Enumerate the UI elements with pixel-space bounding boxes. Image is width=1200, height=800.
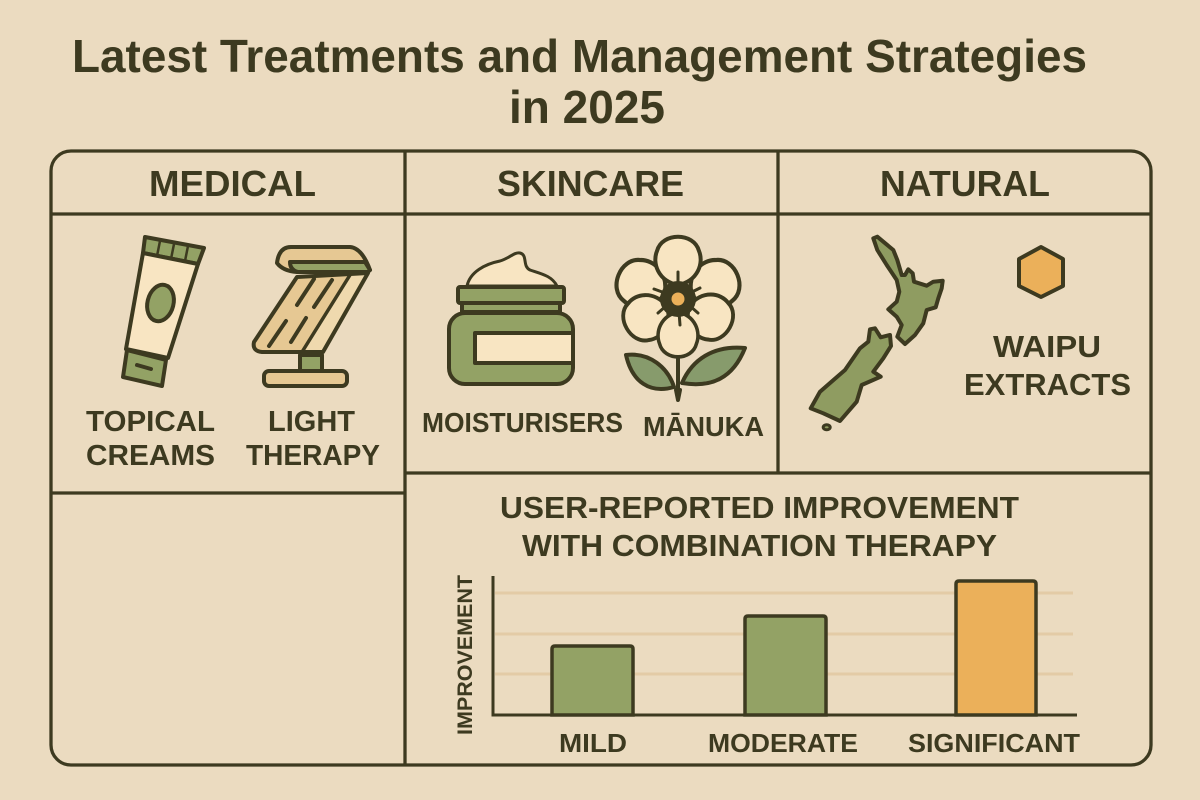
panel: medical — [86, 163, 380, 472]
icon: light therapy lamp — [254, 247, 370, 386]
label: light therapy — [246, 406, 380, 472]
label: waipu extracts: WAIPU — [993, 329, 1101, 364]
icon: new zealand map — [811, 237, 943, 430]
bar: moderate — [745, 616, 826, 715]
label: light therapy: LIGHT — [268, 406, 355, 438]
icon: topical cream tube — [123, 237, 204, 386]
label: moisturisers: MOISTURISERS — [422, 407, 623, 438]
heading: natural: NATURAL — [880, 163, 1050, 204]
panel: skincare — [422, 163, 764, 442]
panel grid — [51, 151, 1151, 765]
label: manuka: MĀNUKA — [643, 411, 764, 442]
label: significant: SIGNIFICANT — [908, 728, 1080, 758]
bar: significant — [956, 581, 1036, 715]
label: moderate: MODERATE — [708, 728, 858, 758]
heading: medical: MEDICAL — [149, 163, 316, 204]
label: mild: MILD — [559, 728, 627, 758]
axes — [493, 576, 1077, 715]
panel: natural — [811, 163, 1131, 430]
label: waipu extracts — [964, 329, 1131, 402]
icon: honey hexagon — [1019, 247, 1063, 297]
label: light therapy: THERAPY — [246, 440, 380, 472]
bar: mild — [552, 646, 633, 715]
title — [72, 30, 1087, 133]
label: topical creams: CREAMS — [86, 440, 215, 472]
icon: moisturiser jar — [449, 253, 573, 384]
label: topical creams: TOPICAL — [86, 406, 215, 438]
icon: manuka flower — [610, 237, 746, 400]
panel: combination therapy chart — [454, 490, 1080, 758]
label: topical creams — [86, 406, 215, 472]
chart title: USER-REPORTED IMPROVEMENT — [500, 490, 1019, 525]
title: in 2025 — [509, 81, 665, 133]
chart title: WITH COMBINATION THERAPY — [522, 528, 997, 563]
y axis label: IMPROVEMENT — [454, 575, 477, 735]
heading: skincare: SKINCARE — [497, 163, 684, 204]
label: waipu extracts: EXTRACTS — [964, 367, 1131, 402]
title: Latest Treatments and Management Strategies — [72, 30, 1087, 82]
bar chart — [493, 576, 1077, 715]
chart title — [500, 490, 1019, 563]
